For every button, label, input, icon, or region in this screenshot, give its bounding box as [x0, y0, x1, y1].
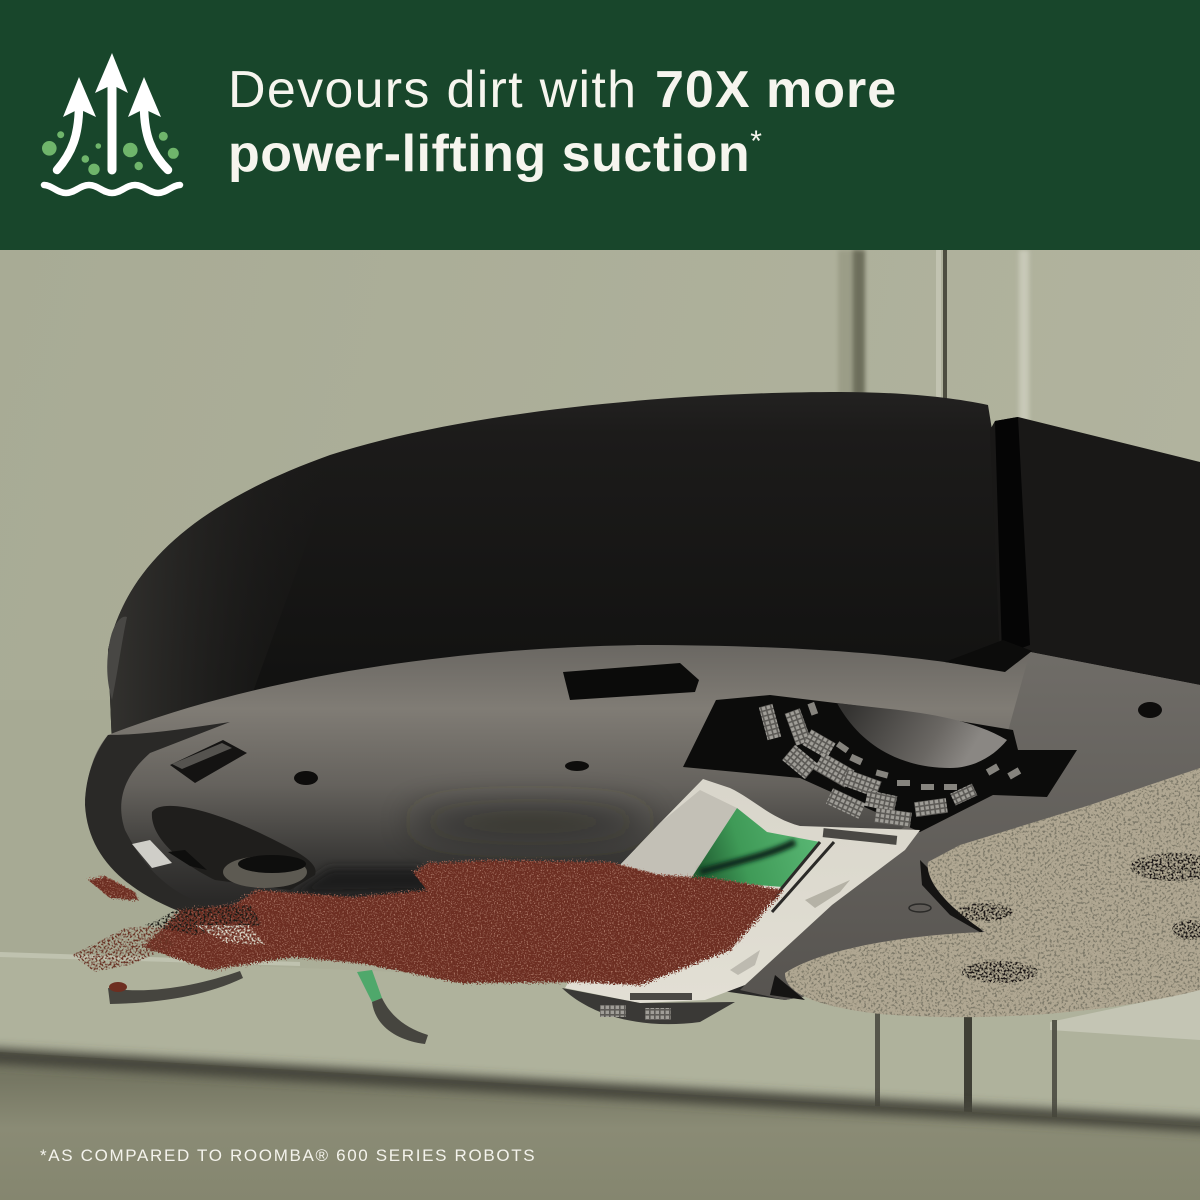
mop: dark dirt patches [957, 853, 1200, 983]
robot: brush opening [683, 695, 1077, 832]
mop pads [785, 768, 1200, 1017]
icon: suction arrows lifting dirt [42, 53, 180, 193]
heading line 2: power-lifting suction [228, 125, 750, 183]
robot: green roller [690, 808, 820, 887]
dirt: sparse left spray [72, 925, 175, 972]
icon: wavy floor line [44, 185, 180, 193]
robot: rubber brush tread blocks [759, 704, 977, 827]
dirt: dark flecks [145, 905, 262, 935]
heading line 1: Devours dirt with [228, 61, 637, 119]
robot: caster wheel [223, 856, 307, 888]
icon: green dirt dots [42, 131, 179, 175]
robot: brush slot tabs [823, 828, 897, 845]
robot: rectangular slot [563, 663, 699, 700]
robot: curved inner dish [837, 703, 1007, 768]
heading [228, 61, 897, 183]
robot: upper shell right section (bumper) [990, 417, 1200, 690]
cabinet: upper vertical seams [838, 250, 858, 420]
robot: shadow on underside [410, 810, 650, 834]
robot: lower cliff sensor [132, 840, 172, 868]
heading line 2: * [750, 125, 762, 158]
robot: dark pad shadows [920, 860, 985, 935]
footnote: *AS COMPARED TO ROOMBA® 600 SERIES ROBOTS [40, 1146, 536, 1165]
cabinet: lower rail lighter panel [0, 955, 1200, 1125]
header band [0, 0, 1200, 250]
robot: white brush frame [565, 779, 920, 1003]
robot: dark rim at left edge [85, 722, 260, 928]
dirt: on bristle tip [109, 982, 127, 992]
robot: tread dash marks [807, 702, 1021, 790]
robot: side sensor window [107, 617, 127, 700]
robot vacuum [72, 392, 1200, 1044]
robot: cliff sensor top [170, 740, 247, 783]
heading line 1: 70X more [655, 61, 897, 119]
robot: small plate tabs [805, 880, 850, 908]
robot: lower brush treads [562, 988, 735, 1024]
side brush: bristle left [108, 971, 243, 1004]
cabinet toe-kick shadow [0, 1046, 1200, 1134]
robot: upper shell left section [108, 392, 1004, 745]
cabinet: lower vertical seams [875, 1012, 880, 1107]
robot: seam wedge at bumper [945, 640, 1032, 672]
dirt: pale dust [195, 925, 265, 945]
floor below cabinet [0, 1052, 1200, 1200]
robot: caster wheel housing [152, 806, 316, 890]
robot: small holes [294, 702, 1162, 785]
icon: three white arrows [57, 53, 168, 174]
robot: plate hole [909, 904, 931, 912]
red dirt pile [72, 860, 783, 985]
background: sage kitchen cabinets [0, 250, 1200, 1200]
side brush: bristle with green base [357, 970, 382, 1002]
dirt: stray patch [88, 876, 138, 900]
robot: underside plate [85, 645, 1200, 1000]
